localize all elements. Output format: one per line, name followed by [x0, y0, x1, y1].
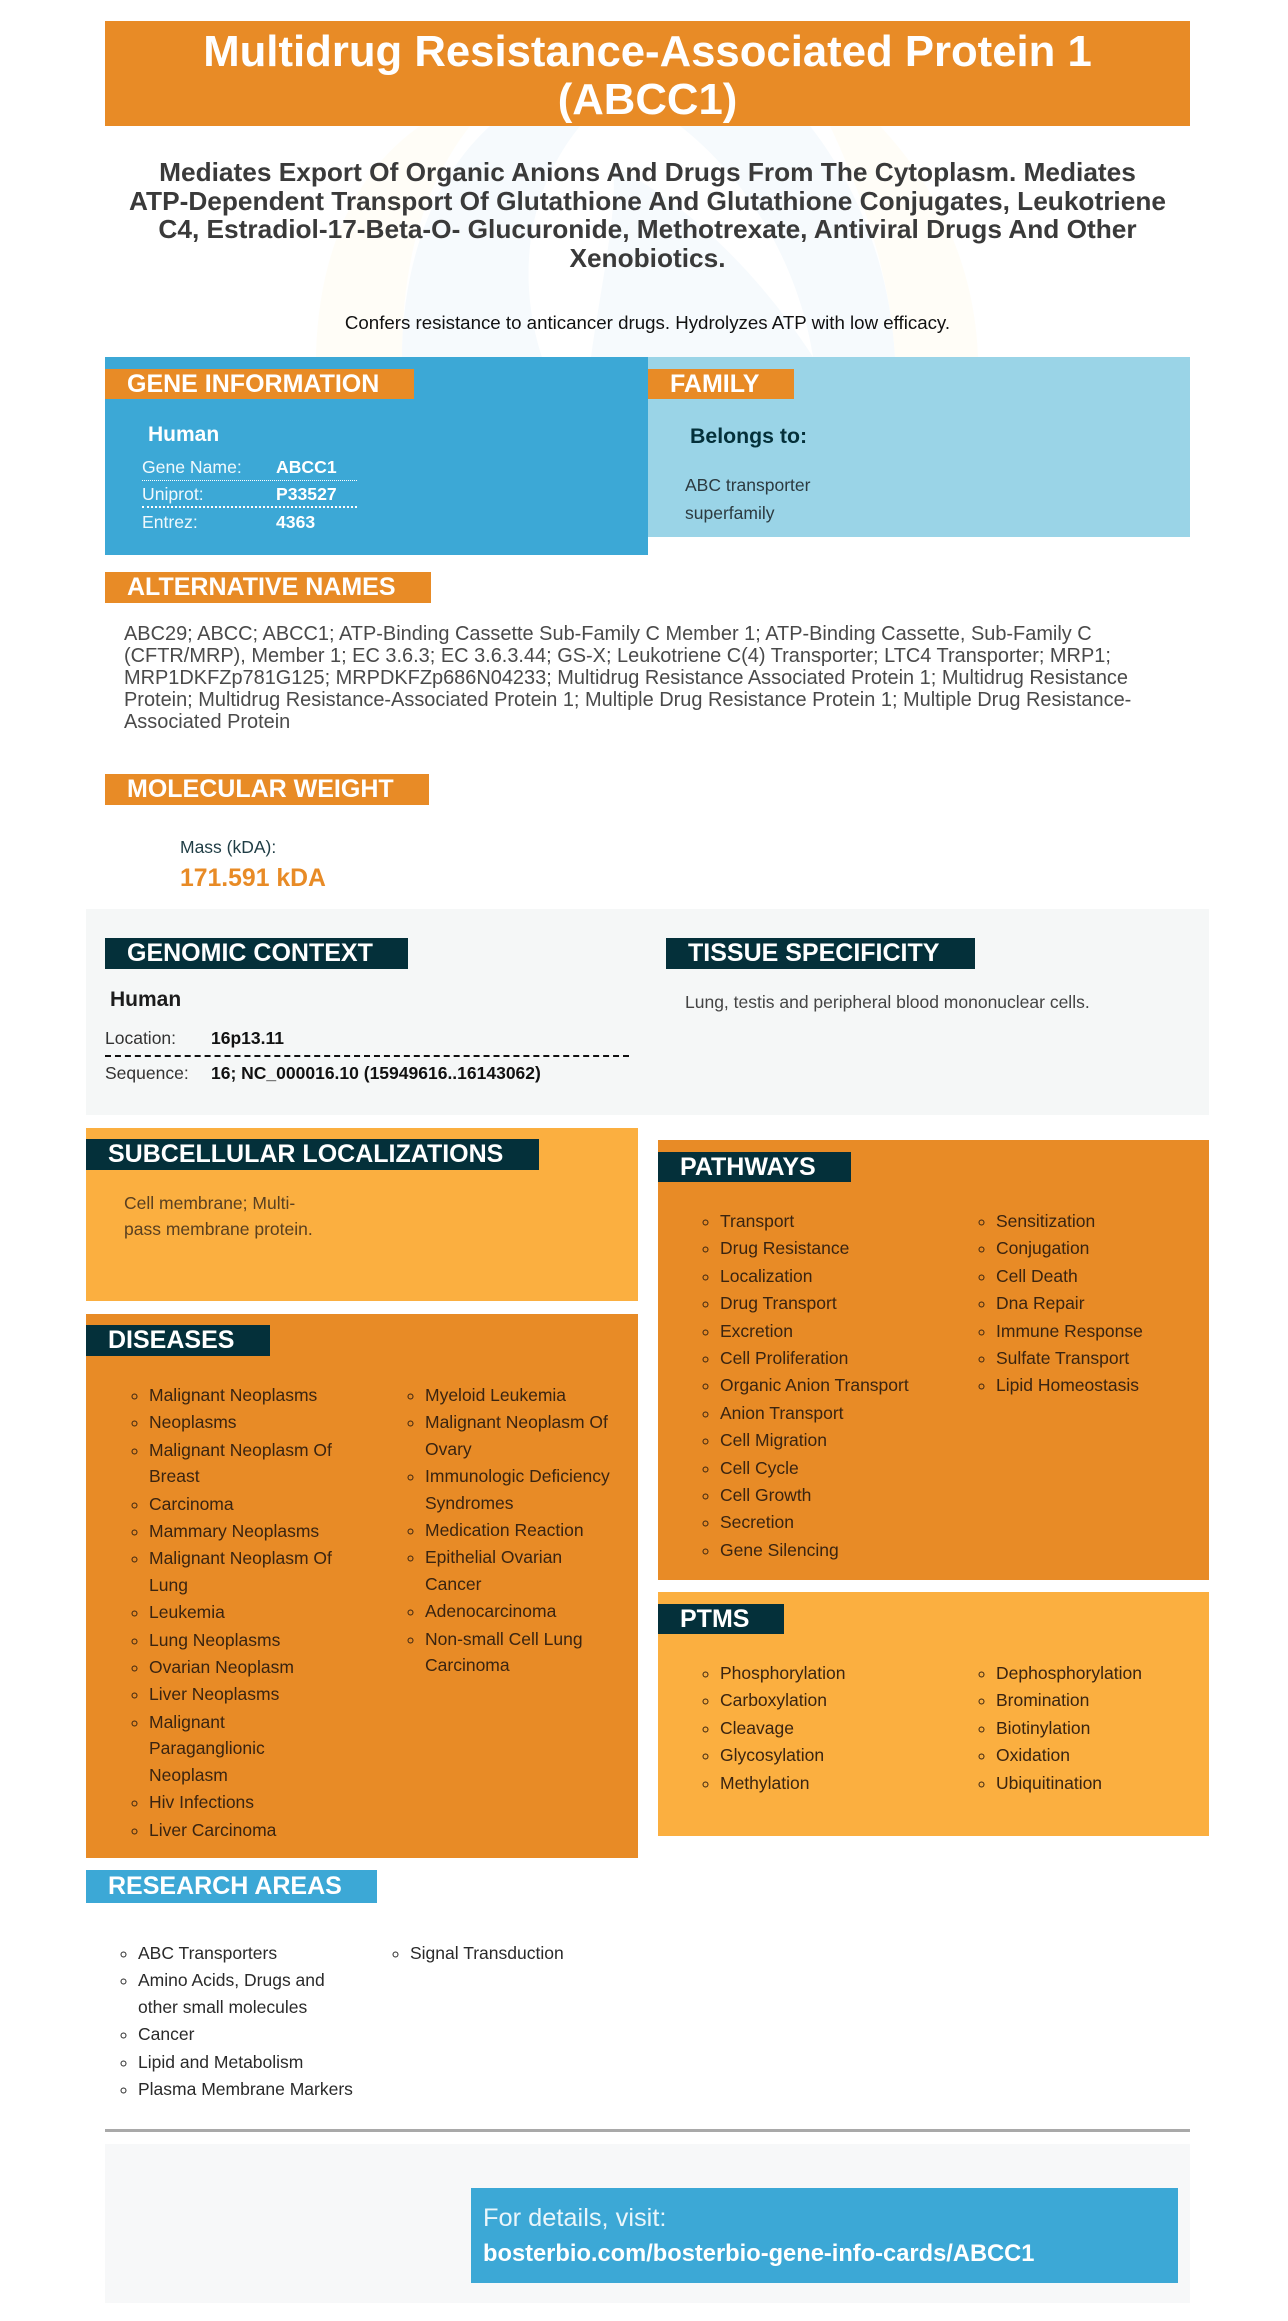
list: ptms column 2 — [978, 1663, 1142, 1793]
list: diseases column 1 — [132, 1385, 332, 1840]
list: pathways column 1: Organic Anion Transport — [720, 1375, 909, 1395]
alternative names text — [124, 623, 1131, 733]
list: research areas column 1: Cancer — [138, 2024, 194, 2044]
heading: family — [648, 369, 794, 399]
localization text: pass membrane protein. — [124, 1219, 313, 1239]
list: pathways column 2: Dna Repair — [996, 1293, 1085, 1313]
panel: pathways — [658, 1140, 1209, 1580]
tissue text: Lung, testis and peripheral blood mononuclear cells. — [685, 992, 1090, 1012]
family text — [685, 475, 810, 523]
title: Multidrug Resistance-Associated Protein 1 — [203, 27, 1092, 76]
list: pathways column 2: Cell Death — [996, 1266, 1078, 1286]
list: research areas column 1 — [120, 1943, 353, 2099]
subtitle: C4, Estradiol-17-Beta-O- Glucuronide, Methotrexate, Antiviral Drugs And Other — [158, 214, 1137, 244]
alternative names text: ABC29; ABCC; ABCC1; ATP-Binding Cassette Sub-Family C Member 1; ATP-Binding Cassette, Sub-Family C — [124, 623, 1092, 645]
list: diseases column 1: Malignant Paraganglionic Neoplasm — [149, 1712, 265, 1785]
description: Confers resistance to anticancer drugs. Hydrolyzes ATP with low efficacy. — [345, 312, 950, 333]
list: diseases column 1: Malignant Neoplasm Of Lung — [149, 1548, 332, 1595]
title — [105, 21, 1190, 126]
heading: gene information: GENE INFORMATION — [127, 370, 379, 398]
list: ptms column 2: Bromination — [996, 1690, 1089, 1710]
species: Human — [110, 988, 181, 1011]
callout label: For details, visit: — [483, 2204, 666, 2232]
list: diseases column 1: Leukemia — [149, 1602, 225, 1622]
heading: genomic context: GENOMIC CONTEXT — [127, 939, 373, 967]
list: diseases column 1: Liver Carcinoma — [149, 1820, 276, 1840]
gene table: Gene Name: — [142, 457, 242, 477]
heading: tissue specificity: TISSUE SPECIFICITY — [688, 939, 939, 967]
list: diseases column 1: Malignant Neoplasms — [149, 1385, 317, 1405]
list: pathways column 1: Drug Resistance — [720, 1238, 849, 1258]
list: pathways column 1: Gene Silencing — [720, 1540, 839, 1560]
list: pathways column 2: Immune Response — [996, 1321, 1143, 1341]
heading: alternative names: ALTERNATIVE NAMES — [127, 573, 396, 601]
alternative names text: Protein; Multidrug Resistance-Associated Protein 1; Multiple Drug Resistance Protein 1; Multiple Drug Resistance- — [124, 689, 1131, 711]
sequence row — [105, 1063, 541, 1083]
list: diseases column 1: Hiv Infections — [149, 1792, 254, 1812]
list: diseases column 2: Myeloid Leukemia — [425, 1385, 566, 1405]
list: ptms column 2: Dephosphorylation — [996, 1663, 1142, 1683]
heading: diseases: DISEASES — [108, 1326, 234, 1354]
list: pathways column 2: Sensitization — [996, 1211, 1095, 1231]
heading: family: FAMILY — [670, 370, 759, 398]
subtitle: Mediates Export Of Organic Anions And Drugs From The Cytoplasm. Mediates — [159, 157, 1136, 187]
heading: subcellular localizations: SUBCELLULAR LOCALIZATIONS — [108, 1140, 503, 1168]
list: pathways column 1: Cell Migration — [720, 1430, 827, 1450]
list: research areas column 1: Lipid and Metabolism — [138, 2052, 303, 2072]
list: diseases column 1: Neoplasms — [149, 1412, 237, 1432]
heading: research areas — [86, 1870, 377, 1903]
list: research areas column 1: Plasma Membrane Markers — [138, 2079, 353, 2099]
panel: diseases — [86, 1314, 638, 1858]
family text: ABC transporter — [685, 475, 810, 495]
list: pathways column 2: Conjugation — [996, 1238, 1089, 1258]
list: pathways column 1: Cell Cycle — [720, 1458, 799, 1478]
list: ptms column 1: Glycosylation — [720, 1745, 824, 1765]
list: ptms column 1: Cleavage — [720, 1718, 794, 1738]
list: pathways column 1: Secretion — [720, 1512, 794, 1532]
location row: Location: — [105, 1028, 176, 1048]
mass value: 171.591 kDA — [180, 865, 326, 892]
list: pathways column 1: Transport — [720, 1211, 794, 1231]
list: diseases column 2: Malignant Neoplasm Of Ovary — [425, 1412, 608, 1459]
title: (ABCC1) — [558, 75, 737, 124]
divider — [105, 2129, 1190, 2132]
list: pathways column 1 — [702, 1211, 909, 1560]
list: ptms column 1: Carboxylation — [720, 1690, 827, 1710]
list: diseases column 1: Malignant Neoplasm Of Breast — [149, 1440, 332, 1486]
list: ptms column 2: Oxidation — [996, 1745, 1070, 1765]
list: pathways column 1: Cell Proliferation — [720, 1348, 848, 1368]
panel: family — [648, 357, 1190, 537]
mass label: Mass (kDA): — [180, 837, 276, 857]
list: pathways column 2: Lipid Homeostasis — [996, 1375, 1139, 1395]
panel: gene information — [105, 357, 648, 555]
callout: details link — [471, 2188, 1178, 2283]
heading: ptms: PTMS — [680, 1605, 749, 1633]
heading: pathways — [658, 1152, 851, 1182]
panel: genomic context and tissue specificity: 16p13.11 — [211, 1028, 284, 1048]
subtitle: Xenobiotics. — [569, 243, 726, 273]
list: diseases column 2: Non-small Cell Lung Carcinoma — [425, 1629, 583, 1675]
list: diseases column 1: Liver Neoplasms — [149, 1684, 279, 1704]
subtitle: ATP-Dependent Transport Of Glutathione And Glutathione Conjugates, Leukotriene — [129, 186, 1166, 216]
list: diseases column 1: Ovarian Neoplasm — [149, 1657, 294, 1677]
gene table: Entrez: — [142, 512, 198, 532]
localization text: Cell membrane; Multi- — [124, 1193, 295, 1213]
callout url: bosterbio.com/bosterbio-gene-info-cards/ABCC1 — [483, 2241, 1034, 2267]
list: ptms column 1: Methylation — [720, 1773, 810, 1793]
list: pathways column 1: Drug Transport — [720, 1293, 837, 1313]
list: pathways column 1: Excretion — [720, 1321, 793, 1341]
alternative names text: Associated Protein — [124, 711, 290, 733]
list: pathways column 1: Anion Transport — [720, 1403, 844, 1423]
subtitle — [129, 157, 1166, 273]
list: diseases column 2: Medication Reaction — [425, 1520, 584, 1540]
list: ptms column 1 — [702, 1663, 846, 1793]
panel: footer — [105, 2144, 1190, 2303]
panel: ptms — [658, 1592, 1209, 1836]
heading: diseases — [86, 1325, 270, 1356]
list: pathways column 1: Cell Growth — [720, 1485, 811, 1505]
panel: genomic context and tissue specificity — [86, 909, 1209, 1115]
list: ptms column 2: Ubiquitination — [996, 1773, 1102, 1793]
belongs to: Belongs to: — [690, 424, 807, 448]
panel: subcellular localizations — [86, 1128, 638, 1301]
family text: superfamily — [685, 503, 774, 523]
list: diseases column 1: Mammary Neoplasms — [149, 1521, 319, 1541]
list: ptms column 2: Biotinylation — [996, 1718, 1090, 1738]
list: diseases column 2: Adenocarcinoma — [425, 1601, 556, 1621]
alternative names text: MRP1DKFZp781G125; MRPDKFZp686N04233; Multidrug Resistance Associated Protein 1; Multidrug Resistance — [124, 667, 1128, 689]
dashed divider — [105, 1055, 629, 1057]
gene table: ABCC1 — [276, 457, 337, 477]
gene table — [142, 457, 357, 532]
panel: genomic context and tissue specificity: 16; NC_000016.10 (15949616..16143062) — [211, 1063, 541, 1083]
list: diseases column 1: Lung Neoplasms — [149, 1630, 280, 1650]
gene table: 4363 — [276, 512, 315, 532]
list: pathways column 2: Sulfate Transport — [996, 1348, 1129, 1368]
sequence row: Sequence: — [105, 1063, 189, 1083]
list: research areas column 1: ABC Transporters — [138, 1943, 277, 1963]
list: pathways column 2 — [978, 1211, 1143, 1395]
localization text — [124, 1193, 313, 1239]
gene table: P33527 — [276, 484, 337, 504]
species: Human — [148, 423, 219, 446]
list: diseases column 2: Immunologic Deficiency Syndromes — [425, 1466, 610, 1513]
heading: ptms — [658, 1604, 784, 1634]
list: research areas column 1: Amino Acids, Drugs and other small molecules — [138, 1970, 325, 2017]
watermark — [402, 126, 895, 357]
heading: pathways: PATHWAYS — [680, 1153, 816, 1181]
list: research areas column 2: Signal Transduction — [410, 1943, 564, 1963]
location row — [105, 1028, 284, 1048]
heading: molecular weight: MOLECULAR WEIGHT — [127, 775, 394, 803]
gene table: Uniprot: — [142, 484, 204, 504]
list: diseases column 2 — [408, 1385, 610, 1675]
list: pathways column 1: Localization — [720, 1266, 812, 1286]
list: diseases column 1: Carcinoma — [149, 1494, 234, 1514]
list: ptms column 1: Phosphorylation — [720, 1663, 846, 1683]
list: diseases column 2: Epithelial Ovarian Cancer — [425, 1547, 562, 1594]
alternative names text: (CFTR/MRP), Member 1; EC 3.6.3; EC 3.6.3.44; GS-X; Leukotriene C(4) Transporter; LTC4 Transporter; MRP1; — [124, 645, 1111, 667]
heading: research areas: RESEARCH AREAS — [108, 1872, 342, 1900]
